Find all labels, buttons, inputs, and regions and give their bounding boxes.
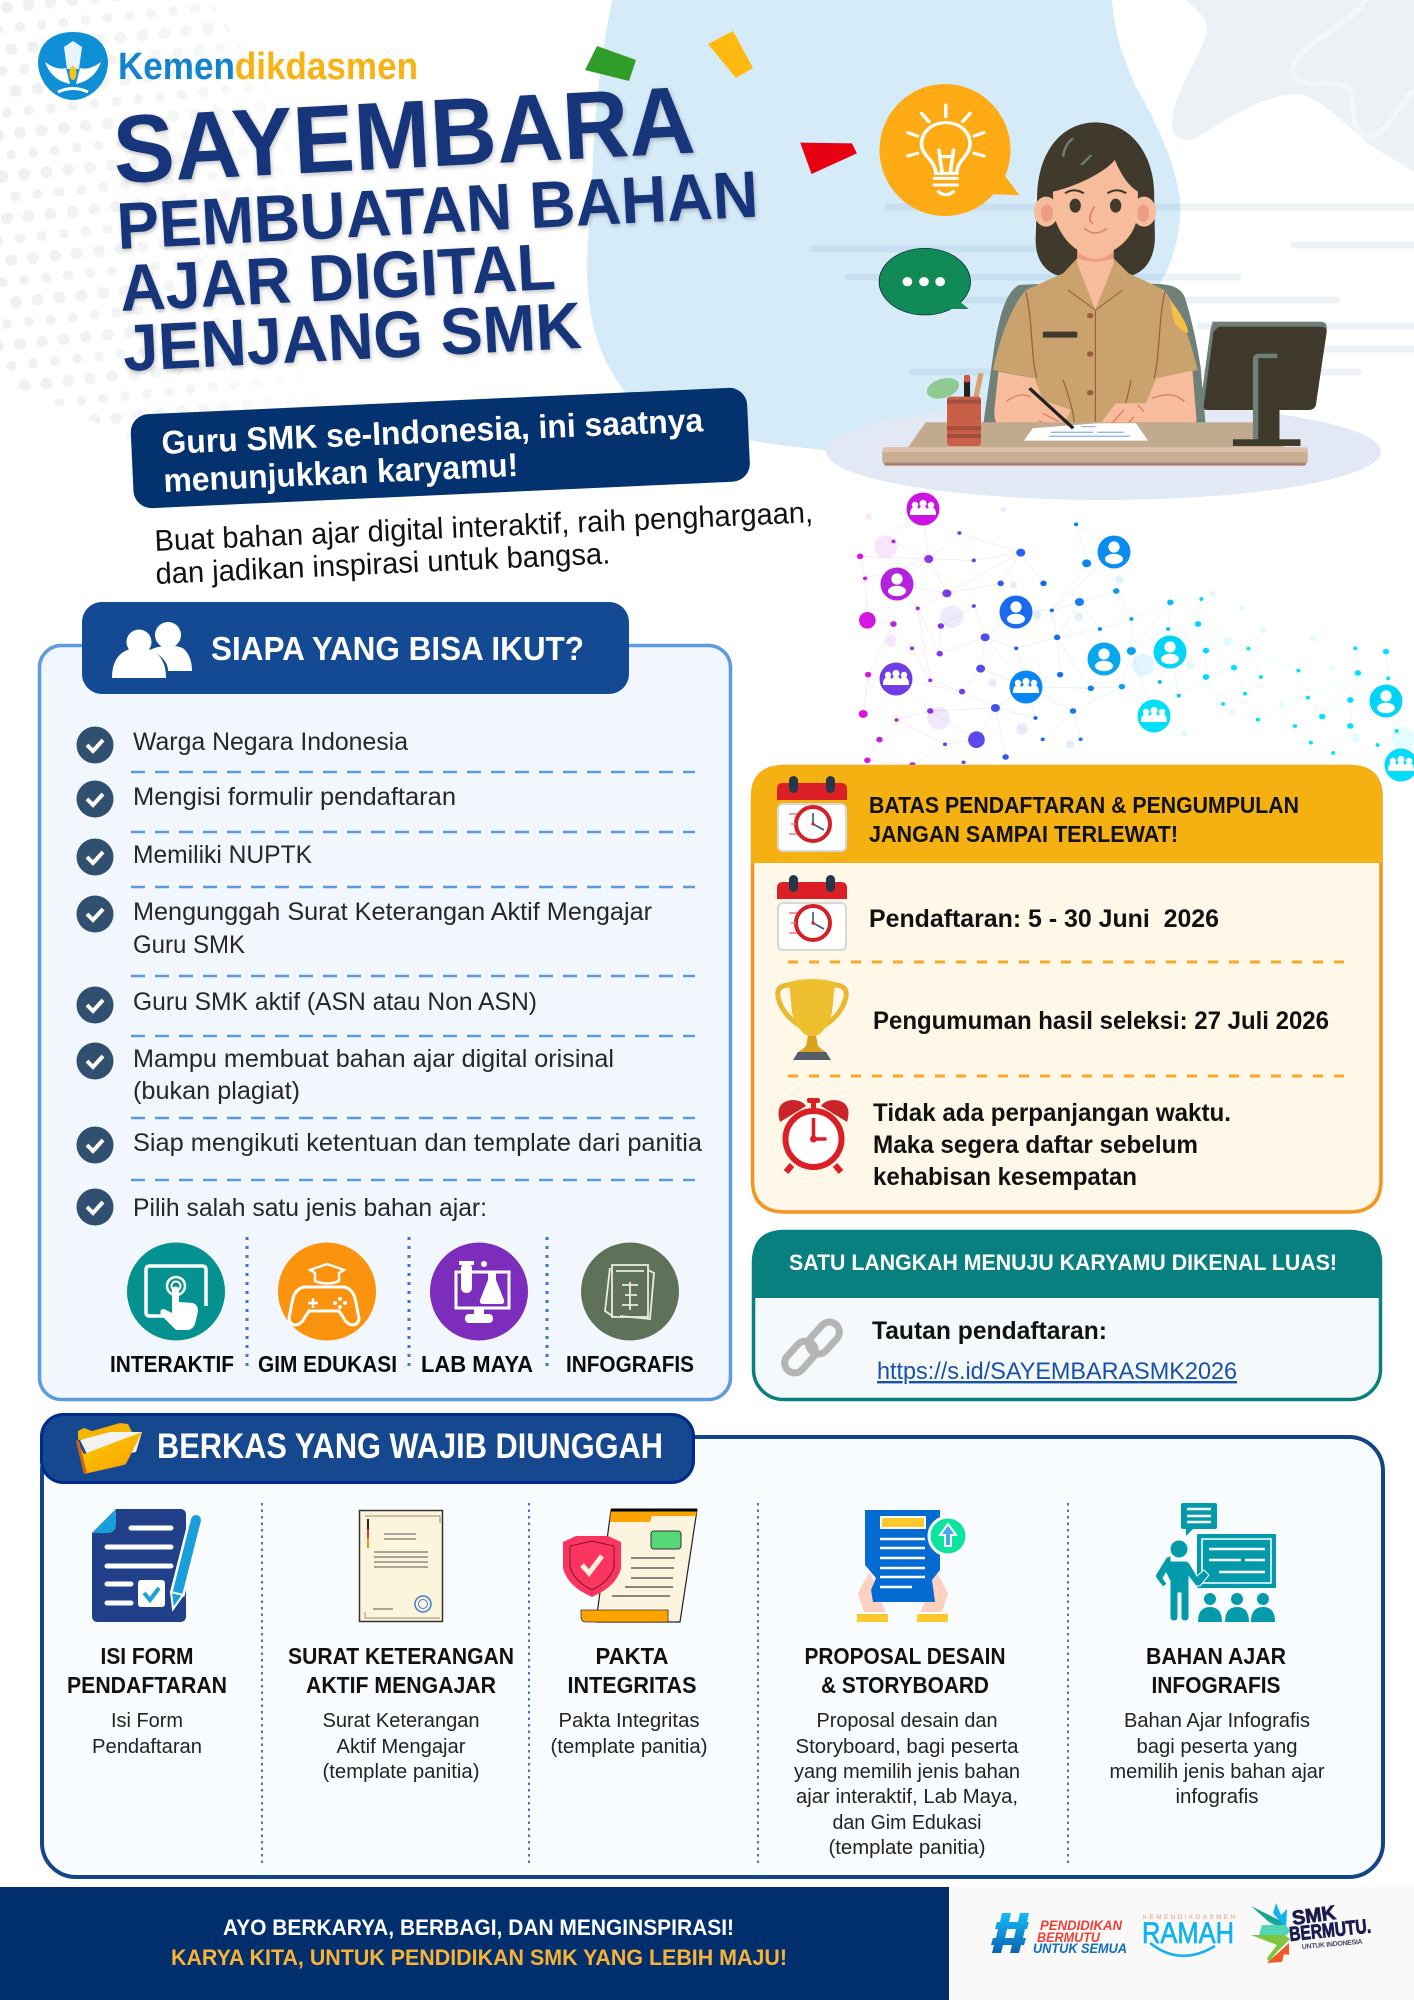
icon: interaktif: [127, 1242, 225, 1340]
heading: deadlines: [751, 765, 1382, 863]
network graphic: [859, 492, 1414, 782]
text: certificate: (template panitia): [322, 1761, 480, 1783]
text: requirements: [133, 728, 702, 1222]
labels: material types: INFOGRAFIS: [566, 1351, 694, 1377]
text: form: [67, 1643, 227, 1758]
text: requirements: Siap mengikuti ketentuan dan template dari panitia: [133, 1129, 702, 1157]
panel: required files: [42, 1414, 1383, 1877]
text: footer slogan: KARYA KITA, UNTUK PENDIDIKAN SMK YANG LEBIH MAJU!: [171, 1945, 787, 1970]
text: infographic material: BAHAN AJAR: [1146, 1643, 1286, 1669]
text: proposal: & STORYBOARD: [821, 1672, 989, 1698]
title: SAYEMBARA: [110, 67, 697, 204]
face: [1053, 160, 1138, 255]
subtitle: Buat bahan ajar digital interaktif, raih penghargaan,: [154, 496, 814, 558]
icon: certificate: [360, 1510, 442, 1622]
labels: material types: GIM EDUKASI: [258, 1351, 397, 1377]
text: footer slogan: [171, 1915, 787, 1970]
heading: siapa yang bisa ikut: [82, 602, 629, 694]
text: proposal: Proposal desain dan: [816, 1710, 998, 1732]
text: no extension: Maka segera daftar sebelum: [873, 1131, 1198, 1159]
panel: deadlines: [751, 765, 1382, 1212]
logo: pendidikan bermutu: PENDIDIKAN: [1040, 1917, 1123, 1933]
icon: chat bubble: [879, 248, 970, 315]
heading: deadlines: JANGAN SAMPAI TERLEWAT!: [869, 821, 1178, 847]
icon list: check marks: [76, 726, 114, 1226]
labels: material types: INTERAKTIF: [110, 1351, 234, 1377]
text: proposal: (template panitia): [828, 1837, 986, 1859]
labels: material types: [110, 1351, 694, 1377]
desk: [907, 422, 1286, 448]
text: integrity pact: [550, 1643, 708, 1758]
text: form: Isi Form: [111, 1710, 183, 1732]
logo: Kemendikdasmen: Kemendikdasmen: [118, 46, 418, 88]
text: integrity pact: PAKTA: [596, 1643, 668, 1669]
panel: siapa yang bisa ikut: [40, 602, 730, 1400]
text: infographic material: bagi peserta yang: [1136, 1736, 1298, 1758]
icon: gim edukasi: [278, 1242, 376, 1340]
logo: smk bermutu: SMK: [1291, 1902, 1338, 1930]
monitor: [1253, 355, 1279, 440]
text: infographic material: Bahan Ajar Infografis: [1124, 1710, 1310, 1732]
heading: registration link: SATU LANGKAH MENUJU KARYAMU DIKENAL LUAS!: [789, 1250, 1337, 1275]
background blob: grey: [1172, 0, 1414, 172]
logo: smk bermutu: BERMUTU.: [1288, 1916, 1372, 1946]
text: proposal: PROPOSAL DESAIN: [804, 1643, 1006, 1669]
neck: [1077, 250, 1114, 310]
text: proposal: yang memilih jenis bahan: [794, 1761, 1020, 1783]
text: integrity pact: Pakta Integritas: [558, 1710, 700, 1732]
icon: alarm clock: [778, 1098, 848, 1172]
text: registration link: https://s.id/SAYEMBARASMK2026: [877, 1358, 1237, 1385]
icon: form: [92, 1509, 201, 1622]
logo: ramah: RAMAH: [1142, 1917, 1234, 1950]
heading: required files: [42, 1414, 694, 1482]
title: [110, 67, 760, 385]
confetti shapes: [585, 31, 753, 81]
background blob: light blue: [587, 0, 1180, 452]
text: requirements: Guru SMK: [133, 931, 245, 959]
logo: smk bermutu: UNTUK INDONESIA: [1302, 1939, 1363, 1951]
text: no extension: Tidak ada perpanjangan waktu.: [873, 1099, 1231, 1127]
text: infographic material: infografis: [1176, 1786, 1258, 1808]
text: integrity pact: (template panitia): [550, 1736, 708, 1758]
heading: deadlines: BATAS PENDAFTARAN & PENGUMPULAN: [869, 792, 1299, 818]
icon: integrity pact: [563, 1510, 697, 1622]
logo: pendidikan bermutu: [991, 1913, 1127, 1956]
title: JENJANG SMK: [121, 288, 583, 385]
text: requirements: (bukan plagiat): [133, 1077, 300, 1105]
text: footer slogan: AYO BERKARYA, BERBAGI, DAN MENGINSPIRASI!: [223, 1915, 734, 1940]
logo: pendidikan bermutu: BERMUTU: [1037, 1929, 1101, 1945]
heading: registration link: [752, 1230, 1382, 1298]
title: AJAR DIGITAL: [118, 229, 557, 325]
text: requirements: Memiliki NUPTK: [133, 841, 312, 869]
hair: [1036, 122, 1155, 277]
icon: chain link: [781, 1318, 843, 1377]
subtitle: [154, 496, 814, 591]
background dot pattern: [0, 0, 222, 438]
text: registration link: [872, 1317, 1237, 1385]
icon: proposal: [857, 1510, 967, 1622]
text: integrity pact: INTEGRITAS: [568, 1672, 696, 1698]
text: registration link: Tautan pendaftaran:: [872, 1317, 1107, 1345]
text: proposal: dan Gim Edukasi: [832, 1812, 982, 1834]
icon: calendar: [777, 875, 847, 950]
text: no extension: kehabisan kesempatan: [873, 1163, 1137, 1191]
labels: material types: LAB MAYA: [421, 1351, 533, 1377]
subtitle: dan jadikan inspirasi untuk bangsa.: [155, 537, 611, 591]
text: registration date: Pendaftaran: 5 - 30 Juni 2026: [869, 905, 1219, 933]
text: certificate: Surat Keterangan: [322, 1710, 480, 1732]
text: form: PENDAFTARAN: [67, 1672, 227, 1698]
icon: infografis: [581, 1242, 679, 1340]
text: requirements: Guru SMK aktif (ASN atau Non ASN): [133, 988, 537, 1016]
network icon nodes: [880, 492, 1414, 782]
banner: call to teachers: Guru SMK se-Indonesia, ini saatnya: [161, 401, 704, 461]
text: no extension: [873, 1099, 1231, 1191]
icon: lab maya: [430, 1242, 528, 1340]
text: requirements: Warga Negara Indonesia: [133, 728, 408, 756]
text: certificate: AKTIF MENGAJAR: [306, 1672, 496, 1698]
icon: idea bubble: [879, 84, 1019, 216]
title: PEMBUATAN BAHAN: [115, 157, 760, 263]
footer: [0, 1887, 1414, 2000]
logo: Kemendikdasmen: [38, 32, 418, 100]
name tag and buttons: [1043, 332, 1077, 338]
text: proposal: Storyboard, bagi peserta: [796, 1736, 1019, 1758]
text: requirements: Mengunggah Surat Keterangan Aktif Mengajar: [133, 898, 652, 926]
icon: folder: [76, 1423, 142, 1474]
text: requirements: Pilih salah satu jenis bahan ajar:: [133, 1194, 487, 1222]
text: infographic material: memilih jenis bahan ajar: [1110, 1761, 1325, 1783]
arms: [994, 372, 1071, 428]
ears: [1034, 197, 1058, 227]
icon: trophy: [778, 979, 846, 1060]
text: requirements: Mengisi formulir pendaftaran: [133, 783, 456, 811]
illustration: teacher at desk: [800, 84, 1381, 500]
shirt: [993, 258, 1198, 427]
heading: siapa yang bisa ikut: SIAPA YANG BISA IKUT?: [211, 630, 584, 667]
pen cup: [964, 375, 970, 398]
logo: smk bermutu: [1251, 1902, 1372, 1963]
panel: registration link: [752, 1230, 1382, 1400]
banner: call to teachers: menunjukkan karyamu!: [163, 446, 519, 499]
icon: presenter: [1156, 1503, 1276, 1622]
text: certificate: [288, 1643, 514, 1783]
chair: [983, 284, 1205, 423]
heading: required files: BERKAS YANG WAJIB DIUNGGAH: [157, 1427, 663, 1466]
logo: ramah: KEMENDIKDASMEN: [1143, 1915, 1235, 1921]
text: form: Pendaftaran: [92, 1736, 202, 1758]
text: certificate: SURAT KETERANGAN: [288, 1643, 514, 1669]
text: requirements: Mampu membuat bahan ajar digital orisinal: [133, 1045, 614, 1073]
banner: call to teachers: [130, 387, 751, 509]
text: proposal: [794, 1643, 1020, 1859]
text: infographic material: [1110, 1643, 1325, 1808]
logo: pendidikan bermutu: UNTUK SEMUA: [1033, 1940, 1127, 1956]
text: certificate: Aktif Mengajar: [336, 1736, 466, 1758]
text: proposal: ajar interaktif, Lab Maya,: [796, 1786, 1018, 1808]
text: announcement date: Pengumuman hasil seleksi: 27 Juli 2026: [873, 1007, 1329, 1035]
text: infographic material: INFOGRAFIS: [1152, 1672, 1280, 1698]
text: form: ISI FORM: [100, 1643, 194, 1669]
